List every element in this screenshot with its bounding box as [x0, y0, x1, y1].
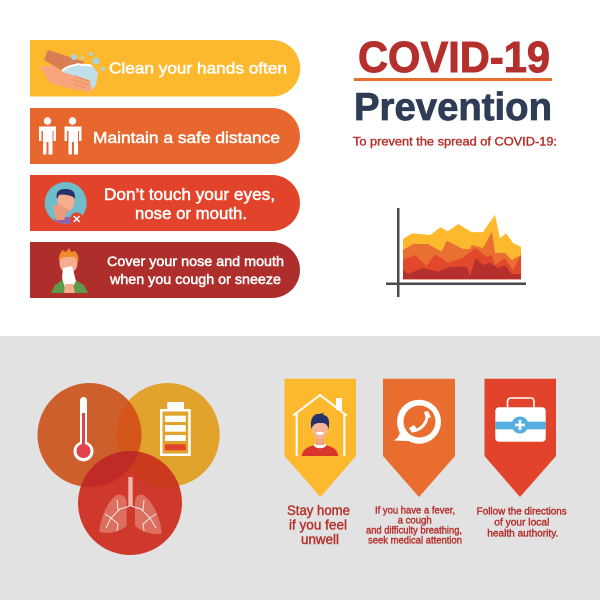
grey lower background panel — [0, 336, 600, 600]
circle: fatigue — [116, 383, 220, 487]
title rule — [354, 78, 552, 81]
overlap: fever and fatigue — [116, 400, 142, 452]
label: clean your hands: Clean your hands often — [109, 60, 287, 78]
icon: phone chat bubble — [393, 400, 441, 444]
label: do not touch face: Don’t touch your eyes, — [104, 185, 275, 204]
text: follow directions — [477, 507, 567, 540]
icon: two people — [39, 117, 82, 154]
chart axes — [386, 208, 526, 297]
icon: person in house — [293, 395, 347, 456]
label: do not touch face: nose or mouth. — [135, 204, 247, 223]
icon: battery — [160, 402, 191, 456]
label: cover nose and mouth — [107, 253, 284, 287]
label: cover nose and mouth: when you cough or sneeze — [109, 271, 281, 287]
pin: follow directions — [484, 379, 556, 497]
text: stay home: Stay home — [287, 503, 350, 518]
icon: lungs — [99, 477, 162, 534]
circle: fever — [38, 383, 142, 487]
title: Prevention: Prevention — [354, 86, 552, 129]
text: follow directions: health authority. — [487, 529, 558, 540]
title: COVID-19: COVID-19 — [358, 33, 550, 82]
overlap: fatigue and breathing — [128, 452, 179, 487]
text: stay home — [287, 503, 350, 547]
icon: first aid kit — [495, 398, 546, 442]
subtitle: To prevent the spread of COVID-19: — [353, 137, 557, 149]
circle: breathing difficulty — [78, 451, 182, 555]
overlap: fever and breathing — [80, 451, 138, 487]
panel: clean your hands — [30, 40, 300, 96]
icon: thermometer — [74, 397, 94, 461]
text: follow directions: Follow the directions — [477, 507, 567, 518]
panel: safe distance — [30, 108, 300, 164]
pin: call for help — [383, 379, 455, 497]
icon: washing hands — [40, 50, 105, 92]
text: stay home: unwell — [301, 532, 339, 547]
panel: do not touch face — [30, 175, 300, 231]
area chart — [386, 208, 526, 297]
icon: boy touching face — [45, 182, 87, 226]
text: seek medical attention: and difficulty breathing, — [366, 526, 462, 536]
label: safe distance: Maintain a safe distance — [93, 130, 280, 147]
label: do not touch face — [104, 185, 275, 223]
text: stay home: if you feel — [289, 518, 347, 532]
text: seek medical attention — [366, 506, 462, 546]
text: follow directions: of your local — [494, 518, 549, 529]
text: seek medical attention: a cough — [398, 516, 432, 526]
label: cover nose and mouth: Cover your nose and mouth — [107, 253, 284, 269]
text: seek medical attention: If you have a fever, — [375, 506, 455, 516]
pin: stay home — [284, 379, 356, 497]
icon: man sneezing into tissue — [51, 248, 88, 293]
panel: cover nose and mouth — [30, 242, 300, 298]
venn diagram — [38, 383, 220, 555]
text: seek medical attention: seek medical attention — [368, 536, 462, 546]
